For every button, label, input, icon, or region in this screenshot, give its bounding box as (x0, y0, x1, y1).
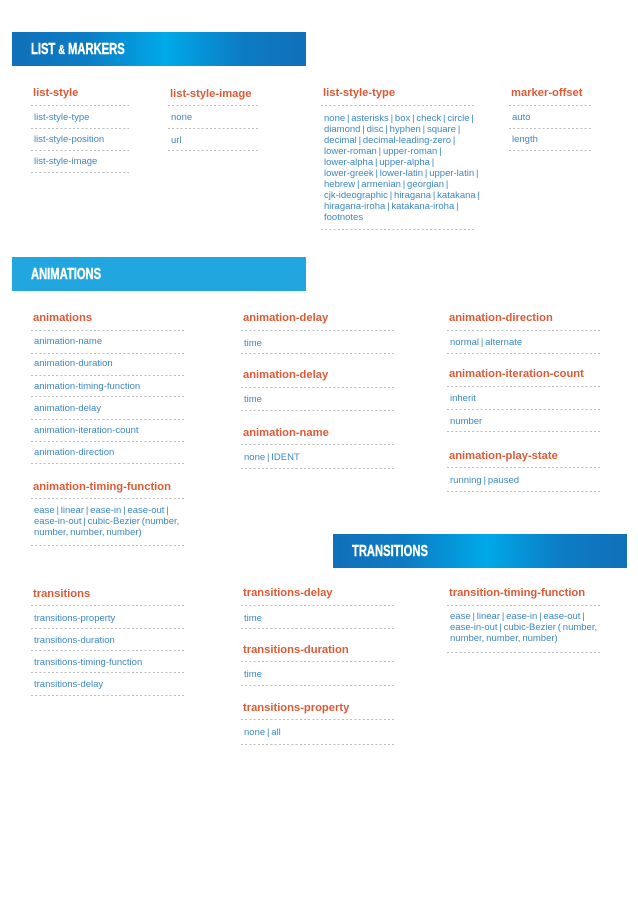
panel: transitions: transitions-property (34, 612, 115, 624)
panel: list-style-type: diamond | disc | hyphen | square | (324, 124, 460, 135)
panel: transitions (31, 588, 184, 696)
panel: animation-delay (second) (241, 369, 394, 411)
panel: animations: animation-name (34, 336, 102, 347)
panel: animation-delay: time (244, 338, 262, 348)
panel: list-style-image: url (171, 134, 182, 146)
panel: animation-delay: animation-delay (243, 312, 328, 324)
panel: animation-timing-function: animation-timing-function (33, 481, 171, 493)
panel: list-style-image (168, 88, 258, 151)
panel: transitions: transitions-duration (34, 634, 115, 646)
panel: transitions-duration: transitions-duration (243, 644, 349, 656)
panel: transitions-delay (241, 587, 394, 629)
panel: list-style-type: hebrew | armenian | georgian | (324, 179, 448, 190)
banner: list & markers (12, 32, 306, 66)
panel: transitions-property: none | all (244, 726, 281, 738)
panel: animations: animation-duration (34, 358, 113, 369)
panel: list-style-type: list-style-type (323, 87, 395, 99)
panel: animation-iteration-count: animation-iteration-count (449, 368, 584, 380)
banner: list & markers: LIST & MARKERS (31, 40, 125, 58)
panel: list-style-type: none | asterisks | box | check | circle | (324, 112, 474, 124)
panel: marker-offset (509, 87, 591, 151)
panel: list-style-type: footnotes (324, 212, 363, 223)
panel: animation-timing-function: ease | linear | ease-in | ease-out | (34, 505, 169, 516)
panel: animation-iteration-count: number (450, 416, 482, 426)
panel: animation-iteration-count (447, 368, 600, 432)
panel: animation-name: none | IDENT (244, 452, 300, 462)
panel: animation-iteration-count: inherit (450, 393, 476, 404)
panel: transitions-duration: time (244, 668, 262, 680)
panel: list-style: list-style-type (34, 112, 89, 122)
panel: animation-delay (241, 312, 394, 354)
panel: transitions-property: transitions-property (243, 702, 349, 714)
panel: transitions-property (241, 702, 394, 745)
panel: list-style-image: none (171, 112, 192, 123)
panel: list-style-type (321, 87, 480, 230)
panel: animation-name: animation-name (243, 427, 329, 439)
panel: animation-play-state: running | paused (450, 474, 519, 486)
panel: list-style-type: lower-roman | upper-roman | (324, 146, 442, 157)
panel: transition-timing-function: transition-timing-function (449, 587, 585, 599)
panel: transitions: transitions-delay (34, 678, 103, 690)
panel: transitions: transitions-timing-function (34, 656, 142, 668)
panel: animations (31, 312, 184, 464)
panel: animation-timing-function: number, number, number) (34, 527, 142, 538)
banner: animations (12, 257, 306, 291)
panel: transition-timing-function (447, 587, 600, 653)
panel: animations: animation-timing-function (34, 381, 140, 392)
panel: list-style: list-style (33, 87, 78, 99)
panel: animation-timing-function (31, 481, 184, 546)
panel: animation-direction: animation-direction (449, 312, 553, 324)
panel: list-style-image: list-style-image (170, 88, 251, 100)
panel: transitions-duration (241, 644, 394, 686)
panel: animations: animation-iteration-count (34, 425, 139, 436)
panel: list-style-type: decimal | decimal-leading-zero | (324, 135, 455, 146)
panel: list-style (31, 87, 129, 173)
panel: list-style-type: hiragana-iroha | katakana-iroha | (324, 201, 459, 212)
panel: marker-offset: length (512, 134, 538, 145)
panel: animation-timing-function: ease-in-out | cubic-Bezier (number, (34, 516, 179, 527)
panel: transitions-delay: time (244, 612, 262, 624)
panel: animations: animations (33, 312, 92, 324)
panel: transition-timing-function: ease-in-out | cubic-Bezier ( number, (450, 622, 597, 633)
panel: transition-timing-function: ease | linear | ease-in | ease-out | (450, 611, 585, 622)
panel: animation-name (241, 427, 394, 469)
panel: animations: animation-delay (34, 403, 101, 414)
panel: marker-offset: auto (512, 112, 530, 123)
panel: transitions-delay: transitions-delay (243, 587, 333, 599)
panel: transition-timing-function: number, number, number) (450, 633, 558, 644)
panel: animation-play-state (447, 450, 600, 492)
panel: list-style-type: lower-alpha | upper-alpha | (324, 157, 434, 168)
panel: list-style: list-style-image (34, 156, 97, 166)
panel: transitions: transitions (33, 588, 90, 600)
panel: animations: animation-direction (34, 447, 114, 458)
panel: animation-direction (447, 312, 600, 354)
panel: animation-play-state: animation-play-state (449, 450, 558, 462)
panel: animation-delay (second): time (244, 394, 262, 404)
panel: list-style: list-style-position (34, 134, 104, 144)
panel: animation-delay (second): animation-delay (243, 369, 328, 381)
panel: animation-direction: normal | alternate (450, 336, 522, 348)
panel: list-style-type: lower-greek | lower-latin | upper-latin | (324, 168, 478, 179)
banner: animations: ANIMATIONS (31, 266, 101, 282)
banner: transitions: TRANSITIONS (352, 542, 428, 560)
banner: transitions (333, 534, 627, 568)
panel: list-style-type: cjk-ideographic | hiragana | katakana | (324, 190, 480, 201)
panel: marker-offset: marker-offset (511, 87, 583, 99)
